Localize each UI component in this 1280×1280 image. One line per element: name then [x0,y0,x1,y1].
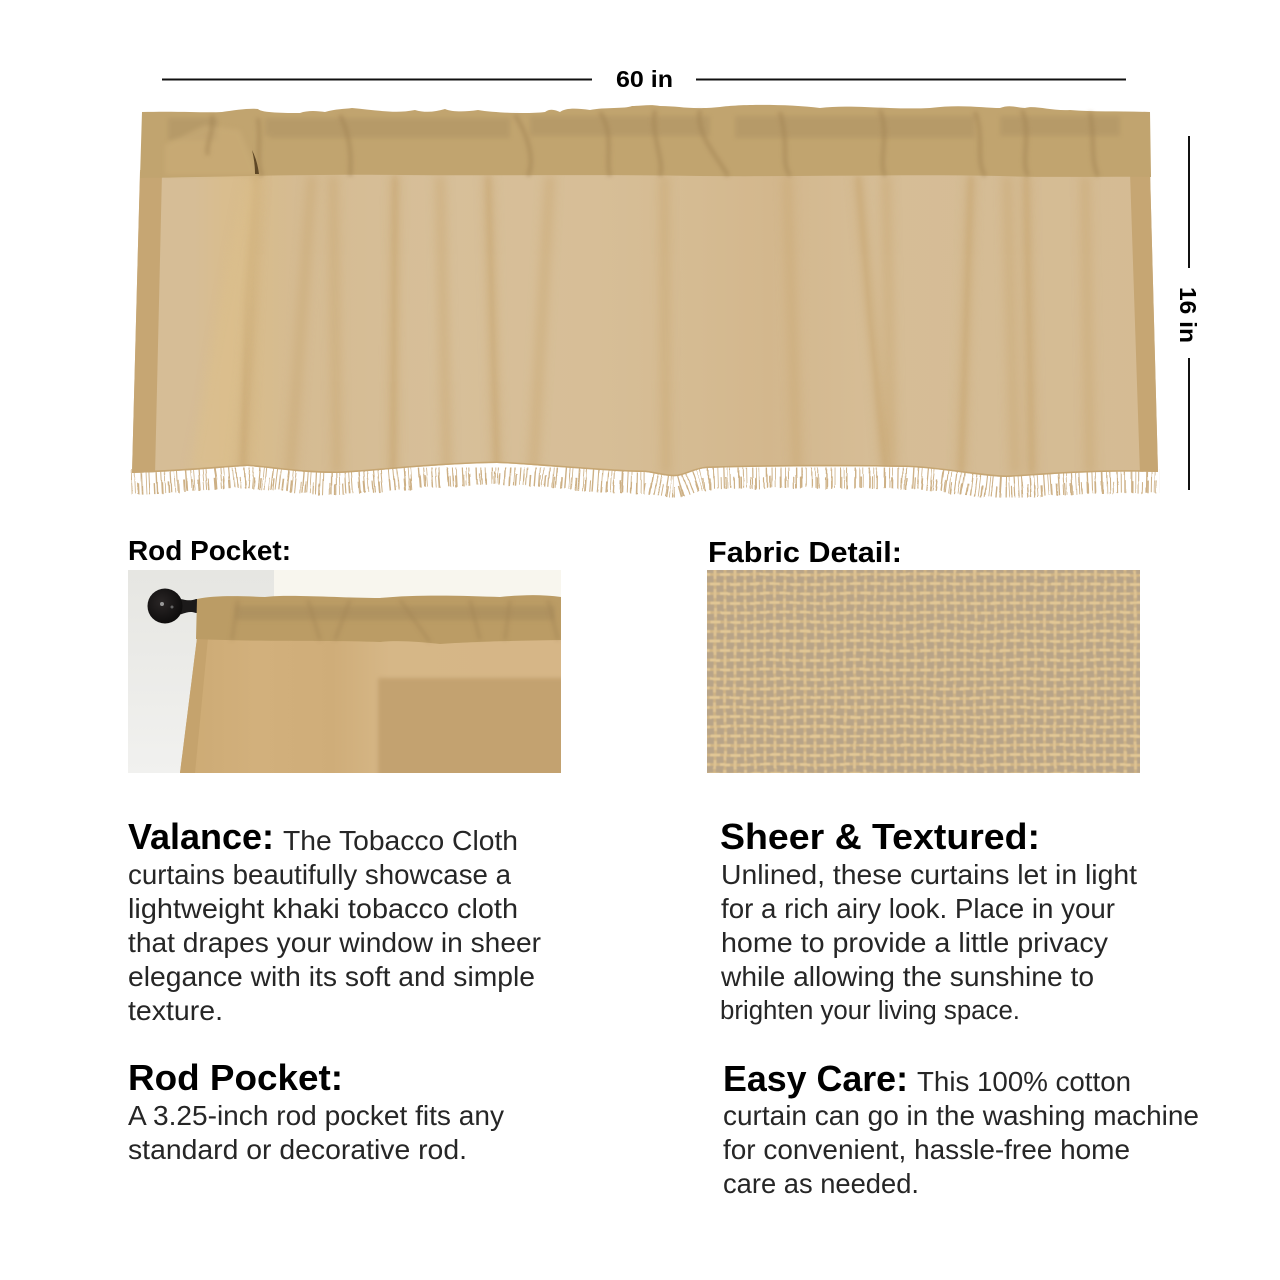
bottom stitched edge [132,463,1158,477]
text block: Rod Pocket: standard or decorative rod. [128,1134,467,1165]
text block: Easy Care: for convenient, hassle-free home [723,1134,1130,1165]
text block: Easy Care [723,1058,1199,1199]
fabric body [125,165,1165,485]
heading: Rod Pocket: Rod Pocket: [128,535,291,566]
text block: Rod Pocket [128,1057,504,1165]
wall [128,570,274,773]
text block: Valance [128,816,541,1026]
photo: rod pocket [128,570,568,778]
text block: Valance: elegance with its soft and simple [128,961,535,992]
curtain valance photo [125,105,1165,493]
curtain header [196,595,561,644]
warm fold highlight [190,178,262,470]
soft folds [243,175,1090,475]
text block: Sheer and Textured: while allowing the sunshine to [720,961,1094,992]
text block: Easy Care: Easy Care: [723,1058,908,1099]
header shading and gathers [165,110,1120,176]
text block: Sheer and Textured: Unlined, these curtains let in light [721,859,1137,890]
text block: Valance: lightweight khaki tobacco cloth [128,893,518,924]
text block: Sheer and Textured: Sheer & Textured: [720,816,1040,857]
text block: Rod Pocket: A 3.25-inch rod pocket fits any [128,1100,504,1131]
text block: Valance: The Tobacco Cloth [283,825,518,856]
side hems [130,172,1160,475]
text block: Easy Care: curtain can go in the washing machine [723,1100,1199,1131]
text block: Valance: that drapes your window in sheer [128,927,541,958]
photo: fabric detail [707,570,1140,773]
crisp fold lines [243,175,1032,475]
curtain body [180,638,561,773]
text block: Valance: Valance: [128,816,274,857]
header gathers [234,604,555,622]
curtain rod finial [148,588,197,624]
heading: Fabric Detail: Fabric Detail: [708,537,902,569]
text block: Sheer and Textured [720,816,1137,1025]
text block: Valance: curtains beautifully showcase a [128,859,512,890]
dimension: height 16 in: 16 in [1175,287,1201,343]
rod pocket header band [140,105,1151,178]
fringe [132,472,1160,493]
dark fold gash [252,150,259,174]
dimension: width 60 in: 60 in [616,66,673,92]
text block: Sheer and Textured: for a rich airy look. Place in your [721,893,1115,924]
text block: Sheer and Textured: home to provide a little privacy [721,927,1108,958]
text block: Sheer and Textured: brighten your living space. [720,997,1020,1025]
text block: Rod Pocket: Rod Pocket: [128,1057,343,1098]
text block: Easy Care: care as needed. [723,1168,919,1199]
text block: Valance: texture. [128,995,223,1026]
text block: Easy Care: This 100% cotton [917,1066,1131,1097]
